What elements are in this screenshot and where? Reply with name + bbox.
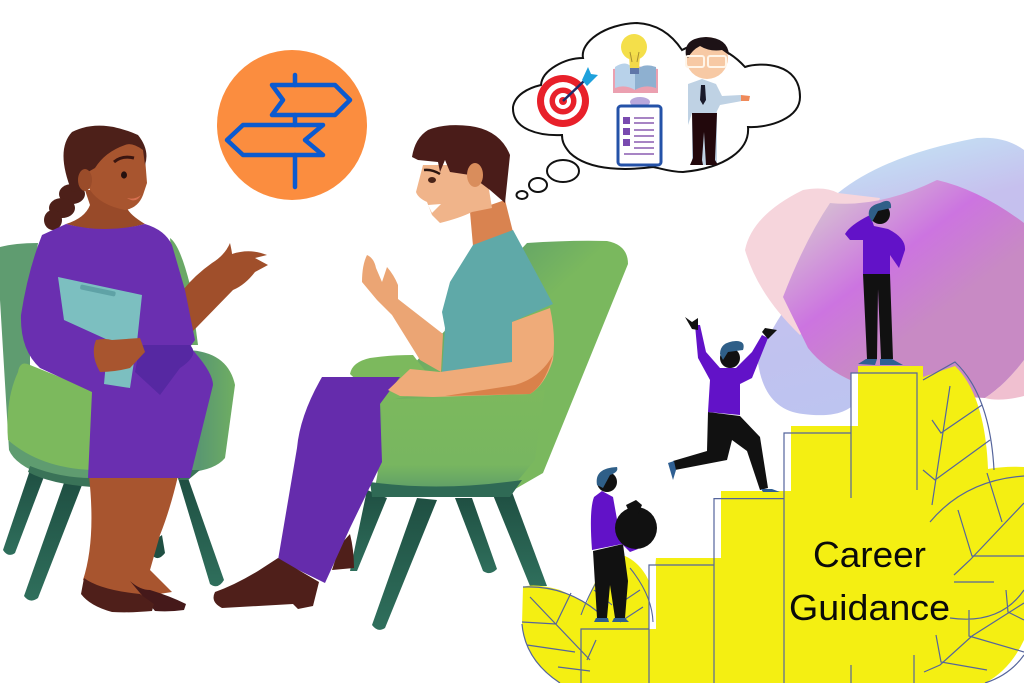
woman's chair (0, 238, 235, 601)
head (416, 165, 492, 223)
figure: man jumping (668, 317, 780, 492)
figure: man with bag (591, 467, 657, 622)
figure: man on top step (845, 201, 905, 365)
icon: target with arrow (537, 67, 598, 127)
man (214, 125, 554, 609)
trousers (278, 377, 400, 583)
text: Career Guidance: Guidance (789, 587, 950, 628)
yellow staircase and leaves (522, 362, 1024, 683)
neck (470, 200, 513, 246)
thought cloud (513, 23, 800, 199)
hand arm (182, 243, 268, 342)
icon: small man in thought (686, 37, 750, 165)
hand (94, 338, 145, 372)
signpost badge (217, 50, 367, 200)
dress (21, 224, 213, 478)
near shoe (214, 558, 319, 609)
clipboard (58, 277, 142, 388)
shoes (130, 581, 186, 611)
neck and head (66, 190, 145, 230)
icon: book and light bulb (613, 34, 658, 93)
legs (83, 476, 178, 600)
shirt (442, 230, 553, 372)
far shoe (332, 534, 354, 570)
woman (21, 126, 268, 612)
icon: checklist clipboard (618, 97, 661, 165)
text: Career Guidance: Career (813, 534, 926, 575)
far arm and hand (362, 255, 443, 372)
man's chair (350, 241, 628, 630)
near arm and hand (388, 308, 554, 397)
text: Career Guidance (789, 534, 950, 628)
hair braid (44, 184, 85, 230)
background blobs (745, 138, 1024, 415)
